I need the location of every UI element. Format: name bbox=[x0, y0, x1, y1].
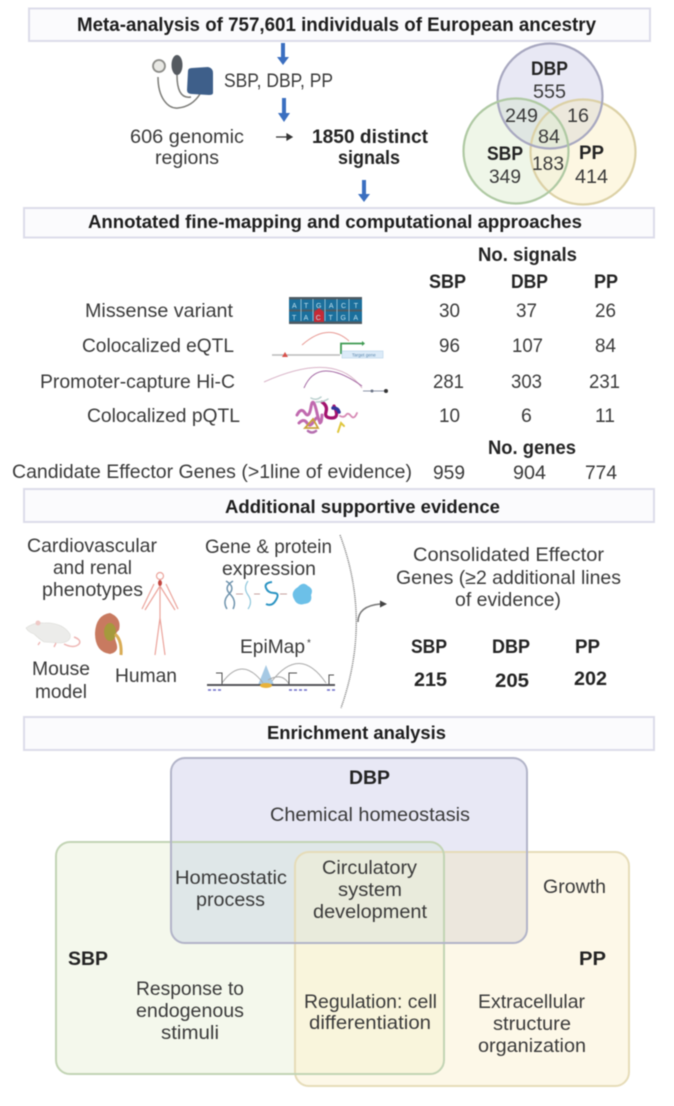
icon: EpiMap regulatory track bbox=[207, 663, 335, 690]
row: colocalized eQTL: 96 bbox=[439, 335, 460, 357]
text: distinct signals bbox=[312, 127, 429, 169]
venn diagram: signals: 555 bbox=[533, 81, 566, 103]
text: homeostatic process bbox=[175, 867, 287, 911]
arrow: down to measures bbox=[277, 43, 289, 65]
text: extracellular structure organization bbox=[478, 991, 586, 1057]
venn rectangle: DBP bbox=[171, 758, 527, 943]
section: fine-mapping table bbox=[12, 208, 654, 484]
text: distinct signals: signals bbox=[338, 148, 400, 169]
text: gene and protein expression bbox=[205, 536, 332, 580]
text: homeostatic process: Homeostatic bbox=[175, 867, 287, 889]
table: consolidated gene counts: PP bbox=[575, 637, 600, 658]
text: response to endogenous stimuli: endogenous bbox=[136, 1000, 244, 1022]
text: circulatory system development: development bbox=[313, 901, 428, 923]
text: genomic regions: regions bbox=[155, 147, 219, 169]
text: extracellular structure organization: organization bbox=[478, 1035, 586, 1057]
text: mouse model: model bbox=[35, 681, 87, 703]
text: extracellular structure organization: structure bbox=[493, 1013, 571, 1035]
row: candidate effector genes: 959 bbox=[433, 462, 465, 484]
icon: mouse bbox=[26, 620, 80, 647]
row: colocalized pQTL: 10 bbox=[439, 405, 460, 427]
text: consolidated effector genes: Consolidated Effector bbox=[413, 544, 605, 566]
heading box: meta-analysis bbox=[29, 8, 650, 41]
row: missense variant: Missense variant bbox=[85, 300, 234, 322]
section: additional supportive evidence bbox=[24, 489, 654, 708]
text: gene and protein expression: Gene & protein bbox=[205, 536, 332, 558]
venn diagram: signals: 183 bbox=[532, 153, 564, 175]
table header: signals: DBP bbox=[511, 272, 548, 293]
heading box: enrichment analysis: Enrichment analysis bbox=[267, 722, 446, 743]
text: measures: SBP, DBP, PP bbox=[224, 70, 333, 92]
text: response to endogenous stimuli: stimuli bbox=[161, 1022, 219, 1044]
row: promoter-capture Hi-C: Promoter-capture Hi-C bbox=[40, 371, 235, 393]
icon: human circulatory system bbox=[142, 572, 178, 655]
text: regulation of cell differentiation: differentiation bbox=[309, 1012, 431, 1034]
text: genomic regions bbox=[130, 126, 244, 169]
text: circulatory system development: Circulatory bbox=[322, 857, 417, 879]
table: consolidated gene counts: 205 bbox=[495, 671, 529, 692]
text: genomic regions: 606 genomic bbox=[130, 126, 244, 148]
venn diagram: signals: DBP bbox=[531, 59, 568, 80]
row: missense variant: 30 bbox=[439, 300, 460, 322]
heading box: meta-analysis: Meta-analysis of 757,601 individuals of European ancestry bbox=[77, 14, 596, 36]
venn diagram: signals: PP bbox=[579, 143, 604, 164]
bracket: evidence merge bbox=[340, 535, 356, 708]
heading box: fine-mapping bbox=[24, 208, 654, 238]
table: consolidated gene counts: 215 bbox=[414, 670, 447, 691]
text: cardiovascular phenotypes: and renal bbox=[53, 557, 132, 579]
row: colocalized pQTL: 6 bbox=[521, 405, 532, 427]
row: candidate effector genes: Candidate Effector Genes (>1line of evidence) bbox=[12, 461, 412, 483]
row: candidate effector genes bbox=[12, 438, 617, 484]
icon: eQTL target gene: Target gene bbox=[352, 352, 376, 358]
text: human: Human bbox=[115, 665, 177, 687]
heading box: fine-mapping: Annotated fine-mapping and computational approaches bbox=[88, 211, 582, 232]
row: colocalized pQTL: 11 bbox=[595, 405, 615, 427]
text: response to endogenous stimuli bbox=[136, 978, 244, 1044]
row: promoter-capture Hi-C: 231 bbox=[589, 371, 620, 393]
row: colocalized pQTL: Colocalized pQTL bbox=[87, 405, 240, 427]
text: mouse model bbox=[32, 658, 90, 703]
row: promoter-capture Hi-C bbox=[40, 371, 620, 393]
venn diagram: signals: 414 bbox=[575, 166, 608, 188]
icon: kidney bbox=[95, 613, 121, 655]
text: cardiovascular phenotypes: Cardiovascular bbox=[27, 535, 157, 557]
text: consolidated effector genes: Genes (≥2 additional lines bbox=[396, 567, 621, 589]
section: meta-analysis bbox=[29, 8, 650, 204]
table: consolidated gene counts bbox=[411, 637, 607, 692]
icon: blood pressure cuff bbox=[153, 55, 213, 108]
text: asterisk: * bbox=[307, 638, 311, 649]
table header: signals: PP bbox=[594, 272, 618, 293]
row: missense variant bbox=[85, 300, 616, 322]
arrow: down to fine-mapping bbox=[358, 180, 370, 202]
text: homeostatic process: process bbox=[196, 889, 265, 911]
table: consolidated gene counts: 202 bbox=[574, 669, 607, 690]
arrow: to consolidated genes bbox=[358, 600, 387, 622]
venn diagram: signals: 249 bbox=[505, 105, 538, 127]
table header: signals: No. signals bbox=[478, 245, 577, 266]
arrow: down to regions bbox=[278, 98, 290, 122]
row: promoter-capture Hi-C: 281 bbox=[433, 371, 464, 393]
row: colocalized pQTL bbox=[87, 405, 615, 427]
icon: protein structure bbox=[297, 397, 357, 432]
icon: Hi-C arcs bbox=[264, 367, 388, 393]
text: regulation of cell differentiation bbox=[304, 991, 437, 1034]
text: extracellular structure organization: Extracellular bbox=[478, 991, 585, 1013]
text: consolidated effector genes: of evidence) bbox=[455, 589, 561, 611]
icon: DNA base pairs bbox=[289, 297, 362, 324]
venn diagram: signals: 84 bbox=[538, 126, 560, 148]
text: gene and protein expression: expression bbox=[222, 558, 316, 580]
table: consolidated gene counts: SBP bbox=[411, 637, 447, 658]
text: EpiMap: EpiMap bbox=[240, 636, 305, 658]
table: consolidated gene counts: DBP bbox=[492, 637, 530, 658]
row: missense variant: 26 bbox=[595, 300, 616, 322]
heading box: enrichment analysis bbox=[24, 717, 654, 750]
arrow: regions to signals bbox=[276, 134, 292, 140]
text: distinct signals: 1850 distinct bbox=[312, 127, 429, 148]
label: PP: PP bbox=[579, 949, 606, 970]
row: colocalized eQTL: 107 bbox=[512, 335, 543, 357]
label: DBP: DBP bbox=[349, 768, 390, 789]
icon: gene expression pathway bbox=[225, 581, 312, 609]
icon: eQTL target gene bbox=[272, 332, 383, 358]
label: SBP: SBP bbox=[68, 949, 108, 970]
section: enrichment analysis bbox=[24, 717, 654, 1086]
heading box: supportive evidence: Additional supportive evidence bbox=[225, 496, 500, 517]
text: regulation of cell differentiation: Regulation: cell bbox=[304, 991, 437, 1013]
row: promoter-capture Hi-C: 303 bbox=[511, 371, 542, 393]
venn diagram: signals bbox=[464, 44, 636, 204]
venn diagram: signals: 349 bbox=[489, 166, 521, 188]
text: response to endogenous stimuli: Response to bbox=[136, 978, 244, 1000]
icon: DNA base pairs: A T G A C T bbox=[292, 303, 359, 310]
text: cardiovascular phenotypes bbox=[27, 535, 157, 601]
row: colocalized eQTL bbox=[82, 335, 616, 357]
text: chemical homeostasis: Chemical homeostasis bbox=[270, 804, 470, 826]
table header: signals bbox=[429, 245, 618, 293]
table header: signals: SBP bbox=[429, 272, 466, 293]
text: cardiovascular phenotypes: phenotypes bbox=[42, 579, 143, 601]
text: consolidated effector genes bbox=[396, 544, 621, 611]
venn overlap regions bbox=[172, 843, 526, 1072]
text: growth: Growth bbox=[543, 876, 606, 898]
text: mouse model: Mouse bbox=[32, 658, 90, 680]
row: candidate effector genes: 904 bbox=[513, 462, 546, 484]
row: missense variant: 37 bbox=[516, 300, 537, 322]
row: candidate effector genes: 774 bbox=[585, 462, 617, 484]
row: candidate effector genes: No. genes bbox=[488, 438, 576, 459]
venn rectangle: PP bbox=[295, 852, 629, 1086]
icon: DNA base pairs: T A C T G A bbox=[292, 315, 358, 322]
venn rectangle: SBP bbox=[56, 842, 444, 1074]
heading box: supportive evidence bbox=[24, 489, 654, 522]
text: circulatory system development: system bbox=[338, 879, 402, 901]
venn diagram: signals: SBP bbox=[487, 144, 523, 165]
row: colocalized eQTL: Colocalized eQTL bbox=[82, 335, 234, 357]
text: circulatory system development bbox=[313, 857, 428, 923]
venn outlines bbox=[56, 758, 629, 1086]
venn diagram: signals: 16 bbox=[567, 105, 589, 127]
row: colocalized eQTL: 84 bbox=[595, 335, 616, 357]
